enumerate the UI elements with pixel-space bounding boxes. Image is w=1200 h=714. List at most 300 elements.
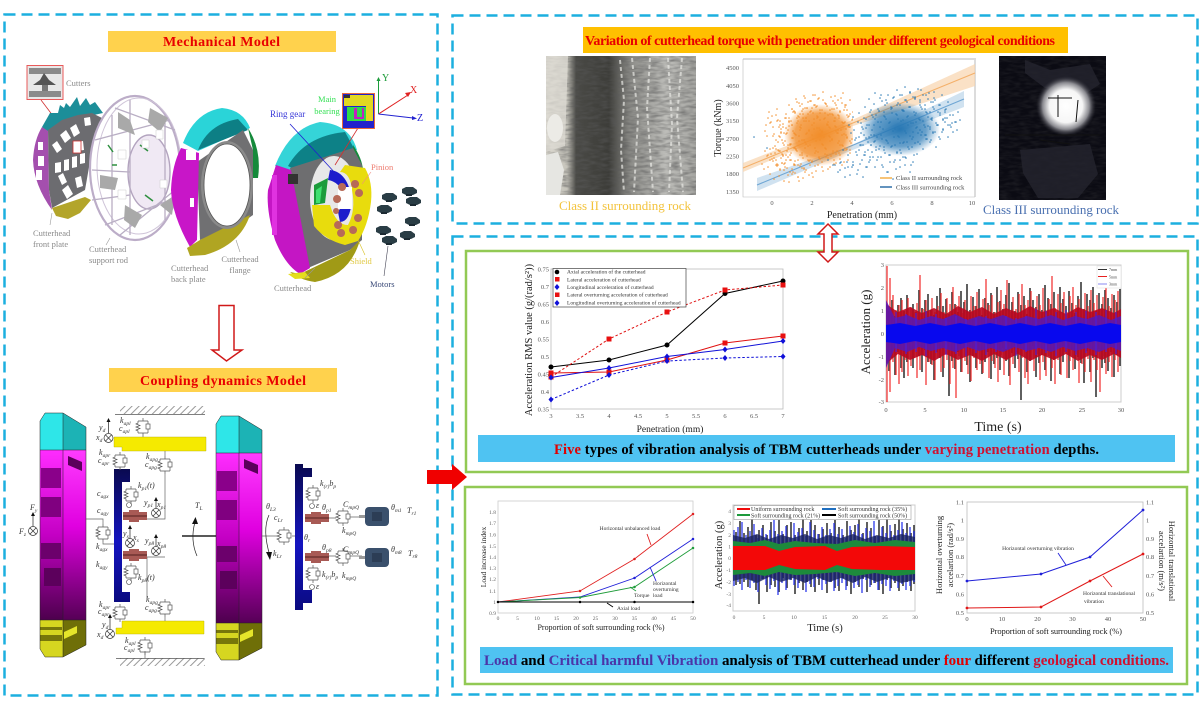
labels: symbols for coupling dynamics model: p1 [141,486,147,492]
label: cutterhead back plate: back plate [171,274,206,284]
legend: penetration depths [1097,266,1121,288]
labels: symbols for coupling dynamics model: x [133,533,137,542]
series: 3mm blue signal [896,309,1116,356]
arrow: mechanical to coupling model [212,306,242,361]
part: pinions [123,510,329,563]
axis: signal ticks: 1 [728,544,731,550]
labels: symbols for coupling dynamics model: apr [102,612,110,618]
axis: signal ticks: 5 [923,407,927,414]
part: left cutterhead section [40,413,86,657]
axis: load chart ticks: 1.1 [489,589,496,595]
axis: vibration chart ticks: 10 [999,616,1005,623]
labels: symbols for coupling dynamics model: r1 [411,511,417,517]
icon: coordinate axes: X [410,85,418,96]
axis label: proportion: Proportion of soft surrounding rock (%) [990,626,1122,636]
labels: symbols for coupling dynamics model: agx [100,547,108,553]
label: cutterhead flange: Cutterhead [221,254,259,264]
axis: signal ticks: -1 [726,568,731,574]
axis: torque tick labels: 3600 [726,100,739,108]
axis: signal ticks: 20 [852,615,858,621]
labels: symbols for coupling dynamics model: F [30,503,35,512]
annotations: vibration chart: vibration [1084,599,1104,605]
axis: signal ticks: 30 [1118,407,1124,414]
axis: signal ticks: 0 [728,556,731,562]
labels: symbols for coupling dynamics model: c [97,506,101,515]
axis: signal ticks: -3 [726,592,731,598]
axis: signal ticks: 10 [961,407,967,414]
axis: load chart ticks: 45 [671,616,676,622]
legend: RMS chart: Lateral overturning acceleration of cutterhead [567,292,668,298]
axis: signal ticks: 25 [1079,407,1085,414]
axis: signal ticks: 25 [882,615,888,621]
axis: vibration chart ticks [956,500,1155,623]
axis: vibration chart ticks: 0.6 [956,592,965,598]
panel: vibration analysis outer frame [452,236,1198,694]
labels: symbols for coupling dynamics model: (r) [324,483,330,490]
labels: symbols for coupling dynamics model: c [145,603,149,612]
series: uniform rock red band [733,546,915,570]
band: dark overlap [733,534,915,583]
axis: RMS chart ticks: 6.5 [750,413,758,420]
caption: five types: Five types of vibration analysis of TBM cutterheads under varying penetration depths. [554,442,1099,458]
labels: symbols for coupling dynamics model: p8 [325,548,332,554]
axis: signal ticks: 3 [881,262,884,269]
labels: symbols for coupling dynamics model: θ [322,503,326,512]
labels: symbols for coupling dynamics model: mpQ [346,531,356,537]
axis: vibration chart ticks: 0.8 [1146,554,1154,561]
labels: symbols for coupling dynamics model: apr [103,453,111,459]
part: yellow main bearing bars [114,437,206,634]
labels: symbols for coupling dynamics model: p8 [160,544,166,550]
labels: symbols for coupling dynamics model: L3 [269,507,276,513]
axis: signal ticks: -2 [879,377,884,384]
label: motors: Motors [370,279,395,289]
axis: load chart ticks: 15 [554,616,560,622]
axis: torque tick labels: 1800 [726,171,739,178]
labels: symbols for coupling dynamics model: k [273,549,277,558]
axis: vibration chart ticks: 30 [1069,616,1076,623]
axis: signal ticks: 15 [1000,407,1006,414]
axis label: acceleration RMS: Acceleration RMS value (g/(rad/s²)) [524,263,535,416]
axis label: acceleration: Acceleration (g) [858,290,873,374]
labels: symbols for coupling dynamics model: d [100,438,103,444]
axis: torque tick labels: 1350 [726,189,739,196]
axis: RMS chart ticks: 6 [723,413,727,420]
heading: mechanical model [108,31,336,52]
labels: symbols for coupling dynamics model: apg [149,608,157,614]
labels: symbols for coupling dynamics model: c [97,489,101,498]
regression band and line: class III [757,91,964,191]
label: cutterhead flange: flange [229,265,251,275]
axis label: time: Time (s) [807,623,843,634]
labels: symbols for coupling dynamics model: y [145,536,149,545]
band: blue core [886,323,1121,344]
labels: symbols for coupling dynamics model: apl [129,641,136,647]
axis label: proportion: Proportion of soft surrounding rock (%) [538,623,665,632]
axis: signal ticks: 30 [912,615,918,621]
axis: load chart ticks: 1.4 [489,555,496,561]
axis: signal ticks: 10 [791,615,797,621]
legend: RMS chart: Axial acceleration of the cutterhead [567,268,646,276]
label: cutterhead: Cutterhead [274,283,312,293]
series: torque [498,548,693,602]
axis: signal ticks: -4 [726,603,731,609]
annotations: load chart: Torque [634,593,650,599]
labels: symbols for coupling dynamics model: agy [100,565,108,571]
labels: symbols for coupling dynamics model: p8 [148,541,154,547]
labels: symbols for coupling dynamics model: y [102,620,106,629]
part: assembled cutterhead [268,122,371,282]
labels: symbols for coupling dynamics model: T [195,501,199,510]
labels: symbols for coupling dynamics model: k [146,595,150,604]
axis: load chart ticks: 30 [612,616,618,622]
axis label: acceleration: Acceleration (g) [714,520,725,589]
axis: signal ticks: 20 [1039,407,1045,414]
labels: symbols for coupling dynamics model: θ [391,503,395,512]
axis: signal ticks: 1 [881,308,884,315]
series: axial acceleration [551,281,783,367]
legend: penetration depths: 3mm [1109,282,1118,286]
labels: symbols for coupling dynamics model: θ [322,543,326,552]
axis label: penetration: Penetration (mm) [827,210,897,221]
labels: symbols for coupling dynamics model: k [342,526,346,535]
axis: torque tick labels: 8 [930,200,934,207]
axis label: penetration: Penetration (mm) [637,424,703,435]
axis: RMS chart ticks: 0.45 [538,372,549,378]
labels: symbols for coupling dynamics model: p1 [147,503,153,509]
label: cutterhead front plate: front plate [33,239,68,249]
icon: motors [376,187,421,276]
arrow: models to analysis [427,464,467,490]
labels: symbols for coupling dynamics model: apr [102,461,110,467]
heading: torque variation: Variation of cutterhead torque with penetration under different geological conditions [585,34,1056,49]
labels: symbols for coupling dynamics model: apg [150,600,158,606]
chart: acceleration RMS vs penetration [524,263,786,435]
axis: signal ticks: -3 [879,399,884,406]
labels: symbols for coupling dynamics model: y [99,423,103,432]
label: shield: Shield [350,256,372,266]
labels: symbols for coupling dynamics model: θ [304,533,308,542]
part: cutterhead back plate [171,108,259,256]
labels: symbols for coupling dynamics model: x [96,433,100,442]
heading: mechanical model: Mechanical Model [163,35,280,50]
label: cutters: Cutters [66,78,91,88]
part: input plate [295,464,312,610]
axis: torque tick labels: 10 [969,200,975,207]
legend: scatter chart [880,175,965,192]
series: horizontal translational vibration [967,554,1143,608]
axis: RMS chart ticks [538,266,785,420]
series: horizontal unbalanced load [498,514,693,602]
legend: RMS chart: Lateral acceleration of cutterhead [567,276,641,284]
labels: symbols for coupling dynamics model: apg [150,457,158,463]
markers: load chart [498,514,693,602]
labels: symbols for coupling dynamics model: k [96,560,100,569]
series: longitudinal acceleration [548,338,786,380]
labels: symbols for coupling dynamics model: z [23,532,27,538]
annotations: load chart: overturning [653,587,679,593]
axis: load chart ticks: 1.5 [489,544,496,550]
axis: load chart ticks: 40 [651,616,657,622]
legend: geological conditions: Soft surrounding rock (35%) [838,506,907,513]
labels: symbols for coupling dynamics model: m1 [395,508,402,514]
scatter: class III blue cluster [754,87,960,179]
labels: symbols for coupling dynamics model: x [157,539,161,548]
axis: vibration chart ticks: 0.8 [956,554,964,561]
labels: symbols for coupling dynamics model: agx [101,494,109,500]
legend: RMS chart [553,268,686,307]
legend: geological conditions [734,506,911,520]
axis: RMS chart ticks: 3 [549,413,553,420]
scatter: class II orange cluster [762,92,860,182]
labels: symbols for coupling dynamics model: θ [266,502,270,511]
axis: signal ticks: -2 [726,580,731,586]
axis: RMS chart ticks: 4 [607,413,611,420]
axis: torque tick labels: 3150 [726,118,739,125]
labels: symbols for coupling dynamics model: y [34,508,38,514]
axis: load chart ticks: 1 [493,600,496,606]
axis: RMS chart ticks: 0.5 [541,354,549,361]
labels: symbols for coupling dynamics model: b [331,570,335,579]
labels: symbols for coupling dynamics model: (t) [147,481,155,490]
axis: load chart ticks: 1.6 [489,532,496,538]
labels: symbols for coupling dynamics model: c [145,460,149,469]
part: motors [359,507,389,567]
regression band and line: class II [743,64,975,172]
series: soft rock 50% black signal [736,514,914,604]
labels: symbols for coupling dynamics model: k [138,481,142,490]
axis: torque tick labels: 4 [850,200,854,207]
axis: vibration chart ticks: 0 [965,616,969,623]
labels: symbols for coupling dynamics model: y [123,529,127,538]
axis label: right vertical: Horizontal translational [1167,521,1177,601]
chart: horizontal overturning and translational vibration [934,500,1177,636]
labels: symbols for coupling dynamics model: r [308,538,311,544]
icon: coordinate axes [376,73,423,124]
part: ring gear plate [114,469,130,602]
heading: torque variation [583,27,1068,53]
axis label: left vertical: accelartion (rad/s²) [945,523,955,587]
labels: symbols for coupling dynamics model: apl [128,648,135,654]
label: pinion: Pinion [371,162,394,172]
label: cutterhead support rod: Cutterhead [89,244,126,254]
labels: symbols for coupling dynamics model: k [99,600,103,609]
heading: coupling dynamics model: Coupling dynamics Model [140,374,306,389]
annotations: load chart: Axial load [617,606,640,612]
labels: symbols for coupling dynamics model: F [19,527,24,536]
labels: symbols for coupling dynamics model: ε [316,501,320,510]
label: cutterhead front plate: Cutterhead [33,228,70,238]
axis label: torque: Torque (kNm) [713,99,724,157]
legend: RMS chart: Longitudinal overturning acceleration of cutterhead [567,300,681,306]
axis: vibration chart ticks: 0.5 [1146,610,1154,617]
labels: symbols for coupling dynamics model: p8 [141,578,147,584]
labels: symbols for coupling dynamics model: p1 [325,508,332,514]
legend: penetration depths: 5mm [1109,274,1118,280]
axis: load chart ticks: 1.3 [489,566,496,572]
annotations: load chart: Horizontal unbalanced load [600,526,661,532]
labels: symbols for coupling dynamics model: C [343,500,348,509]
axis: signal ticks: 3 [728,521,731,527]
axis: torque tick labels: 0 [770,200,774,207]
axis: RMS chart ticks: 0.65 [538,302,549,308]
axis: load chart ticks: 25 [593,616,598,622]
labels: symbols for coupling dynamics model: p [332,484,336,490]
legend: scatter chart: Class III surrounding rock [896,184,965,192]
caption: load and vibration [480,647,1173,673]
labels: symbols for coupling dynamics model: apr [103,605,111,611]
chart: torque vs penetration scatter [713,58,975,221]
band: dark red core [886,304,1121,364]
caption: five types [478,435,1175,462]
labels: symbols for coupling dynamics model: c [124,643,128,652]
axis: torque tick labels: 4500 [726,65,739,72]
axis: RMS chart ticks: 3.5 [576,413,584,420]
labels: symbols for coupling dynamics model: c [98,607,102,616]
labels: symbols for coupling dynamics model: c [119,424,123,433]
series: horizontal overturning load [498,539,693,602]
labels: symbols for coupling dynamics model: ε [316,582,320,591]
icon: coordinate axes: Y [382,73,389,84]
labels: symbols for coupling dynamics model: mpQ [346,576,356,582]
labels: symbols for coupling dynamics model: c [98,456,102,465]
axis: RMS chart ticks: 0.35 [538,406,549,414]
icon: coordinate axes: Z [417,113,423,124]
axis: vibration chart ticks: 0.9 [956,536,964,543]
chart: load increase index [479,501,696,632]
labels: symbols for coupling dynamics model: k [342,571,346,580]
label: class III rock: Class III surrounding rock [983,202,1120,217]
labels: symbols for coupling dynamics model: apg [149,465,157,471]
labels: symbols for coupling dynamics model: k [322,570,326,579]
icon: main bearing inset [342,94,374,128]
axis: signal ticks: 0 [884,407,888,414]
axis: RMS chart ticks: 7 [781,413,785,420]
labels: symbols for coupling dynamics model: k [96,542,100,551]
label: cutterhead support rod: support rod [89,255,129,265]
axis: load chart ticks: 10 [534,616,540,622]
annotations: vibration chart [1002,546,1136,605]
labels: symbols for coupling dynamics model: k [125,636,129,645]
axis: load chart ticks: 35 [632,616,638,622]
labels: symbols for coupling dynamics model: Lr [277,518,284,524]
axis: torque tick labels: 2250 [726,154,739,160]
axis: torque tick labels: 6 [890,200,894,207]
series: horizontal overturning vibration [967,510,1143,581]
annotations: vibration chart: Horizontal overturning vibration [1002,546,1074,552]
legend: geological conditions: Soft surrounding rock (50%) [838,512,907,520]
legend: geological conditions: Soft surrounding rock (21%) [751,512,820,520]
labels: symbols for coupling dynamics model: (r) [326,574,332,581]
axis: signal ticks: 2 [881,285,884,292]
axis: RMS chart ticks: 0.7 [541,284,550,291]
labels: symbols for coupling dynamics model [18,416,418,654]
axis: vibration chart ticks: 1.1 [1146,500,1154,506]
chart: acceleration time history by penetration [858,262,1124,435]
legend: penetration depths: 7mm [1109,267,1118,272]
axis: vibration chart ticks: 40 [1105,616,1111,623]
axis: torque tick labels: 2 [810,200,814,207]
axis: vibration chart ticks: 20 [1034,616,1041,623]
axis label: right vertical: accelartion (m/s²) [1157,531,1167,591]
axis: vibration chart ticks: 1 [961,518,964,524]
part: ground hatching [115,406,205,666]
axis: RMS chart ticks: 5.5 [692,413,700,420]
panel: torque variation with penetration [452,16,1198,224]
labels: symbols for coupling dynamics model: apl [124,421,131,427]
series: lateral acceleration [548,334,786,376]
diagram: coupling dynamics model [18,406,418,666]
axis: signal ticks [879,262,1124,414]
label: ring gear: Ring gear [270,109,305,119]
labels: symbols for coupling dynamics model: b [329,479,333,488]
axis: load chart ticks [489,510,696,622]
axis: load chart ticks: 1.2 [489,577,496,583]
part: right cutterhead section [216,416,262,660]
axis: vibration chart ticks: 1 [1146,518,1149,524]
annotations: load chart: Horizontal [653,581,677,587]
photo: class III surrounding rock [999,56,1106,200]
label: cutterhead back plate: Cutterhead [171,263,208,273]
axis: signal ticks: 0 [733,615,736,621]
axis: signal ticks: 2 [728,533,731,539]
photo: class II surrounding rock [546,56,696,195]
annotations: load chart [600,526,679,612]
axis: load chart ticks: 5 [516,616,519,622]
legend: scatter chart: Class II surrounding rock [896,175,963,182]
caption: load and vibration: Load and Critical harmful Vibration analysis of TBM cutterhead under four different geological conditions. [484,653,1169,669]
labels: symbols for coupling dynamics model: C [343,545,348,554]
axis: load chart ticks: 1.7 [489,521,496,527]
axis: load chart ticks: 1.8 [489,510,496,516]
labels: symbols for coupling dynamics model: Lr [276,554,283,560]
axis label: load increase index: Load increase index [479,527,488,587]
labels: symbols for coupling dynamics model: T [407,506,411,515]
labels: symbols for coupling dynamics model: s [127,534,129,540]
axis: signal ticks: 0 [881,331,884,338]
labels: symbols for coupling dynamics model: m8 [395,550,402,556]
labels: symbols for coupling dynamics model: agy [101,511,109,517]
annotations: vibration chart: Horizontal translational [1083,591,1136,597]
labels: symbols for coupling dynamics model: T [408,549,412,558]
labels: symbols for coupling dynamics model: d [101,635,104,641]
axis: vibration chart ticks: 0.9 [1146,536,1154,543]
labels: symbols for coupling dynamics model: p [334,575,338,581]
panel: five types of vibration analysis [466,251,1188,472]
axis: load chart ticks: 50 [690,616,696,622]
legend: geological conditions: Uniform surrounding rock [751,506,814,513]
axis: signal ticks: -1 [879,354,884,361]
part: crossed force nodes [28,418,314,638]
labels: symbols for coupling dynamics model: d [106,625,109,631]
arrow: double headed between torque and vibration panels [818,224,838,262]
axis: RMS chart ticks: 4.5 [634,413,642,420]
part: spring damper elements [86,418,362,658]
axis: vibration chart ticks: 0.5 [956,610,964,617]
series: lateral overturning acceleration [548,282,786,380]
axis label: left vertical: Horizontal overturning [934,516,944,594]
series: axial load [498,601,693,603]
labels: symbols for coupling dynamics model: x [97,630,101,639]
diagram: exploded cutterhead mechanical model [27,66,423,293]
labels: symbols for coupling dynamics model: k [120,416,124,425]
chart: acceleration under four geological conditions [714,505,918,634]
labels: symbols for coupling dynamics model: (t) [147,573,155,582]
axis: torque tick labels [726,65,975,207]
axis: RMS chart ticks: 0.55 [538,336,549,344]
axis: RMS chart ticks: 5 [665,413,669,420]
axis: torque tick labels: 2700 [726,136,739,143]
